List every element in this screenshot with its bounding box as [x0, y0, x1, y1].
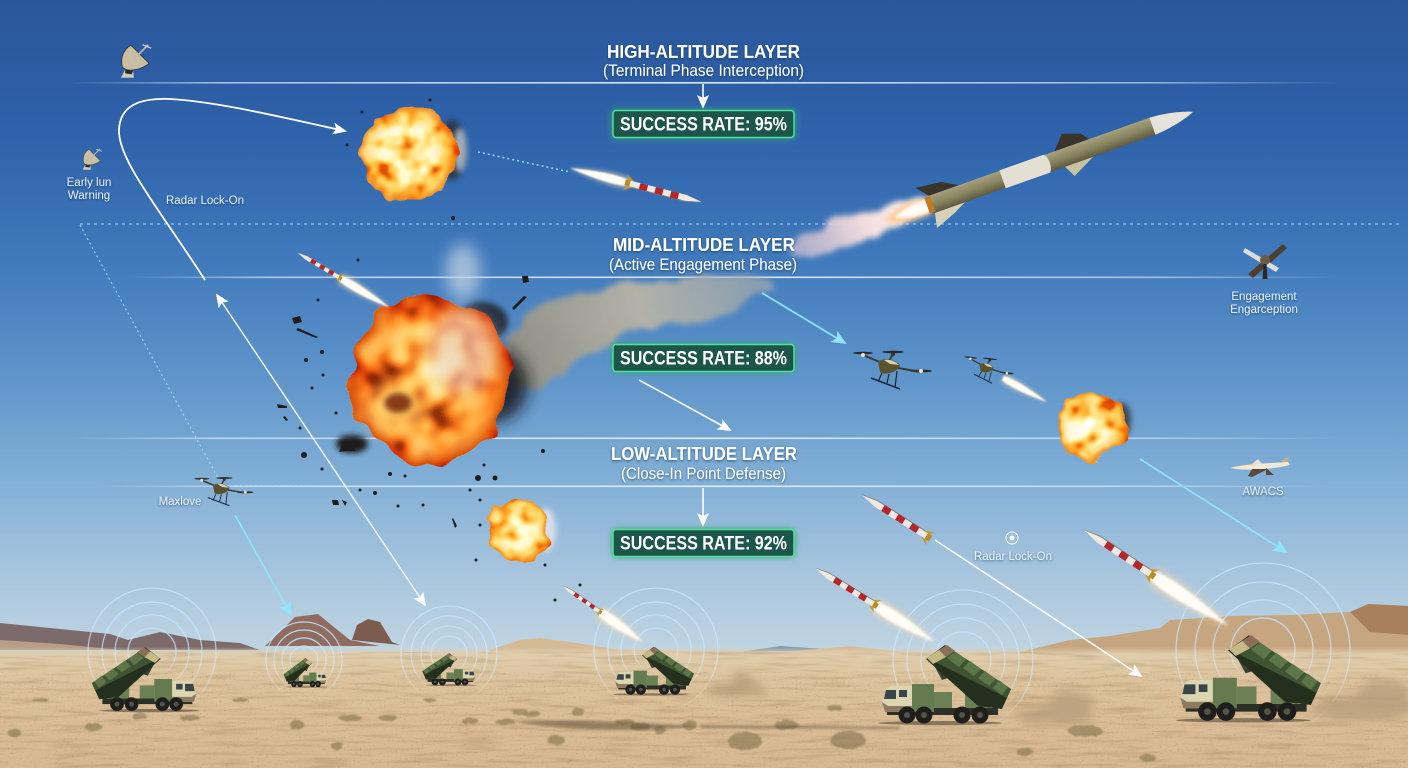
- label: radar lock-on lower: Radar Lock-On: [974, 551, 1052, 563]
- desert ground: [0, 647, 1408, 768]
- large interceptor missile: [877, 90, 1201, 244]
- icon: radar target: [1006, 532, 1018, 544]
- launcher trucks: [92, 635, 1321, 725]
- label: engagement: Engagement: [1231, 291, 1297, 303]
- low-altitude heading: [611, 443, 797, 483]
- label: early warning: [67, 177, 111, 202]
- right explosion: [1058, 392, 1131, 460]
- distant mountains: [0, 604, 1408, 660]
- small missile with flame, left: [295, 248, 393, 313]
- interceptor missile, far right: [1079, 523, 1235, 635]
- white arrow, mid layer: [639, 380, 730, 430]
- top explosion: [362, 107, 467, 201]
- white arrow, high layer: [702, 84, 704, 107]
- badge: low-altitude success rate: [613, 530, 794, 556]
- debris field: [277, 98, 582, 602]
- mid-altitude heading: MID-ALTITUDE LAYER: [613, 234, 795, 255]
- central large explosion: [336, 296, 528, 464]
- drones: [194, 351, 1049, 506]
- low-altitude heading: (Close-In Point Defense): [621, 465, 786, 483]
- radar rings: [88, 563, 1350, 737]
- white arrow, low right: [935, 540, 1141, 676]
- badge: high-altitude success rate: SUCCESS RATE: 95%: [620, 114, 787, 136]
- label: early warning: Warning: [68, 190, 110, 202]
- badge: high-altitude success rate: [613, 110, 794, 138]
- badge: mid-altitude success rate: SUCCESS RATE: 88%: [620, 348, 787, 370]
- mid-altitude heading: [609, 234, 797, 274]
- high-altitude heading: [603, 41, 804, 80]
- interceptor missile, centre right: [812, 562, 939, 649]
- badge: mid-altitude success rate: [613, 344, 794, 372]
- label: engagement: Engarception: [1230, 304, 1298, 316]
- high-altitude heading: HIGH-ALTITUDE LAYER: [607, 41, 800, 62]
- cyan arrows: [80, 152, 1286, 615]
- label: engagement: [1230, 291, 1298, 316]
- label: radar lock-on upper: Radar Lock-On: [166, 195, 244, 207]
- small missile with flame, upper: [568, 162, 704, 210]
- label: AWACS: AWACS: [1242, 486, 1284, 498]
- dust clouds: [708, 673, 1408, 723]
- white arrow, low layer: [702, 488, 704, 525]
- low-altitude heading: LOW-ALTITUDE LAYER: [611, 443, 797, 464]
- altitude lines: [70, 82, 1400, 487]
- icon: engagement aircraft: [1243, 244, 1287, 279]
- icon: satellite dish top: [121, 45, 151, 78]
- interceptor missile, no flame: [858, 488, 935, 546]
- white double-headed arrow: [217, 295, 425, 605]
- icon: AWACS aircraft: [1230, 457, 1290, 477]
- badge: low-altitude success rate: SUCCESS RATE: 92%: [620, 532, 787, 554]
- lower explosion: [488, 499, 556, 561]
- high-altitude heading: (Terminal Phase Interception): [603, 62, 804, 80]
- smoke trail: [446, 200, 927, 388]
- white trajectory arrow, curved: [119, 99, 345, 280]
- interceptor missile, centre: [560, 582, 647, 648]
- mid-altitude heading: (Active Engagement Phase): [609, 256, 797, 274]
- label: maxlove: Maxlove: [159, 496, 201, 508]
- icon: satellite dish small: [83, 149, 102, 170]
- label: early warning: Early lun: [67, 177, 111, 189]
